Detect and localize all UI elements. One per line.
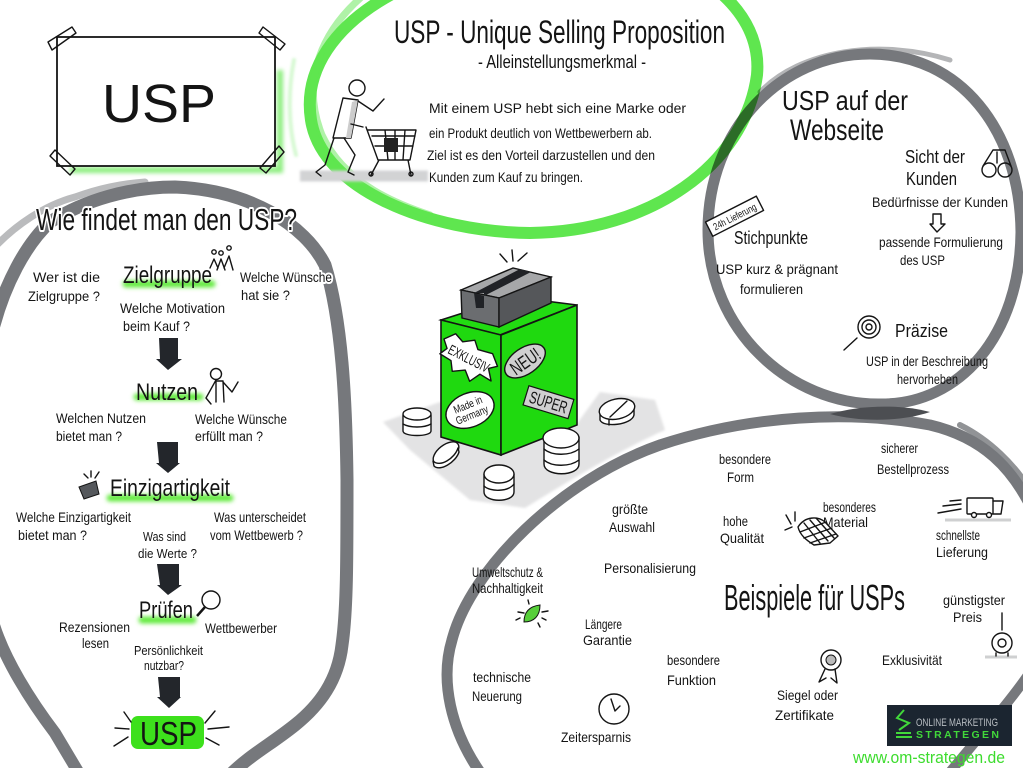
panel content: USP auf der Webseite: Bedürfnisse der Kunden	[872, 194, 1008, 210]
panel content: USP auf der Webseite: Webseite	[790, 114, 884, 147]
step: Nutzen: Welche Wünsche	[195, 411, 287, 427]
text block: USP definition	[427, 100, 686, 185]
panel content: Beispiele für USPs: Längere	[585, 616, 622, 632]
step: Zielgruppe: Wer ist die	[33, 269, 100, 285]
step: Zielgruppe: Welche Wünsche	[240, 269, 332, 285]
step: Prüfen: Rezensionen	[59, 619, 130, 635]
sticker: Exklusiv: EXKLUSIV	[446, 341, 492, 376]
panel content: Beispiele für USPs: Zertifikate	[775, 707, 834, 723]
sticker: Neu: NEU!	[507, 344, 545, 380]
panel content: Beispiele für USPs: schnellste	[936, 527, 980, 543]
panel content: Beispiele für USPs: Bestellprozess	[877, 461, 949, 477]
step: Zielgruppe: Zielgruppe	[123, 262, 212, 289]
arrow: needs to wording	[930, 214, 945, 232]
panel content: Beispiele für USPs: Garantie	[583, 632, 632, 648]
icon: binoculars	[982, 150, 1012, 177]
panel content: USP auf der Webseite: USP auf der	[782, 85, 908, 116]
icon: person with shopping cart	[300, 80, 428, 176]
logo: Online Marketing Strategen: STRATEGEN	[916, 729, 999, 741]
panel content: Beispiele für USPs: Nachhaltigkeit	[472, 580, 543, 596]
step: Nutzen	[56, 368, 287, 444]
panel content: Beispiele für USPs: Beispiele für USPs	[724, 577, 905, 618]
panel content: Beispiele für USPs: Lieferung	[936, 544, 988, 560]
sticker: Made in Germany: Germany	[454, 403, 491, 427]
step: Prüfen: Prüfen	[139, 597, 193, 624]
step: Prüfen: nutzbar?	[144, 658, 184, 673]
panel: grey ring right	[708, 49, 1021, 404]
panel content: Beispiele für USPs: besonderes	[823, 499, 876, 515]
step: Zielgruppe: Zielgruppe ?	[28, 288, 100, 304]
step: Nutzen: erfüllt man ?	[195, 428, 263, 444]
panel content: Beispiele für USPs: Material	[823, 514, 868, 530]
panel content: Beispiele für USPs: Funktion	[667, 672, 716, 688]
panel content: Beispiele für USPs: Neuerung	[472, 688, 522, 704]
panel content: Beispiele für USPs	[472, 440, 1017, 745]
panel content: Beispiele für USPs: günstigster	[943, 592, 1005, 608]
text block: USP definition: ein Produkt deutlich von Wettbewerbern ab.	[429, 125, 652, 141]
text block: USP definition: Mit einem USP hebt sich eine Marke oder	[429, 100, 686, 116]
step: Einzigartigkeit: Welche Einzigartigkeit	[16, 509, 131, 525]
step: Zielgruppe	[28, 246, 332, 334]
heading: Wie findet man den USP?: Wie findet man den USP?	[36, 202, 297, 237]
heading: USP - Unique Selling Proposition	[394, 14, 725, 72]
step: Einzigartigkeit: vom Wettbewerb ?	[210, 527, 303, 543]
step: Prüfen: Persönlichkeit	[134, 643, 203, 658]
panel content: USP auf der Webseite: Sicht der	[905, 147, 965, 167]
panel content: Beispiele für USPs: Preis	[953, 609, 982, 625]
sticker: Exklusiv	[432, 327, 504, 390]
step: Prüfen: lesen	[82, 635, 109, 651]
tape corners	[48, 27, 285, 175]
step: Zielgruppe: beim Kauf ?	[123, 318, 190, 334]
panel content: Beispiele für USPs: Umweltschutz &	[472, 564, 543, 580]
step: Einzigartigkeit: die Werte ?	[138, 546, 197, 561]
title text: USP	[102, 74, 216, 134]
panel: grey ring left	[0, 182, 347, 768]
result: USP highlighted	[114, 711, 229, 752]
arrow: Einzigartigkeit to Prüfen	[157, 564, 182, 595]
sticker: Super	[523, 386, 574, 419]
panel content: USP auf der Webseite: passende Formulierung	[879, 234, 1003, 250]
panel content: Beispiele für USPs: Qualität	[720, 530, 764, 546]
icon: clock	[599, 694, 629, 724]
panel content: USP auf der Webseite: hervorheben	[897, 371, 958, 387]
title box: USP	[48, 27, 285, 175]
icon: leaf	[516, 600, 548, 627]
panel content: Beispiele für USPs: hohe	[723, 513, 748, 529]
panel content: Beispiele für USPs: Zeitersparnis	[561, 729, 631, 745]
heading: USP - Unique Selling Proposition: - Alleinstellungsmerkmal -	[478, 52, 646, 72]
gift boxes	[403, 395, 637, 500]
logo: Online Marketing Strategen: ONLINE MARKETING	[916, 717, 998, 729]
panel content: USP auf der Webseite: Kunden	[906, 169, 957, 189]
step: Zielgruppe: hat sie ?	[241, 287, 290, 303]
panel content: USP auf der Webseite: Stichpunkte	[734, 228, 808, 248]
logo: Online Marketing Strategen	[887, 705, 1012, 746]
panel content: USP auf der Webseite: USP in der Beschreibung	[866, 353, 988, 369]
step: Nutzen: Nutzen	[136, 379, 198, 406]
icon: person thumbs up	[206, 368, 238, 404]
illustration: green product box	[403, 250, 637, 500]
step: Nutzen: Welchen Nutzen	[56, 410, 146, 426]
result: USP highlighted: USP	[140, 715, 197, 752]
arrow: Zielgruppe to Nutzen	[156, 338, 182, 370]
panel: green header ring	[290, 0, 757, 233]
step: Einzigartigkeit	[16, 471, 306, 561]
panel content: Beispiele für USPs: Exklusivität	[882, 652, 942, 668]
panel content: USP auf der Webseite	[706, 85, 1012, 387]
step: Nutzen: bietet man ?	[56, 428, 122, 444]
icon: delivery truck	[938, 498, 1011, 520]
green box	[441, 297, 577, 455]
panel content: Beispiele für USPs: sicherer	[881, 440, 918, 456]
panel content: Beispiele für USPs: besondere	[719, 451, 771, 467]
website url: www.om-strategen.de	[852, 748, 1005, 767]
panel content: USP auf der Webseite: des USP	[900, 252, 945, 268]
icon: rosette seal	[819, 650, 841, 683]
step: Einzigartigkeit: Einzigartigkeit	[110, 475, 230, 502]
panel content: Beispiele für USPs: besondere	[667, 652, 720, 668]
icon: material mesh	[785, 512, 838, 545]
panel: grey ring bottom right	[446, 407, 1023, 768]
step: Zielgruppe: Welche Motivation	[120, 300, 225, 316]
panel content: USP auf der Webseite: USP kurz & prägnant	[716, 261, 838, 277]
icon: small package	[79, 471, 99, 499]
panel content: Beispiele für USPs: technische	[473, 669, 531, 685]
text block: USP definition: Ziel ist es den Vorteil darzustellen und den	[427, 147, 655, 163]
sticker: Made in Germany	[440, 385, 500, 435]
sticker: Made in Germany: Made in	[452, 394, 484, 417]
panel content: Beispiele für USPs: Personalisierung	[604, 560, 696, 576]
step: Prüfen: Wettbewerber	[205, 620, 277, 636]
panel content: USP auf der Webseite: Präzise	[895, 321, 948, 341]
text block: USP definition: Kunden zum Kauf zu bringen.	[429, 169, 583, 185]
icon: magnifier	[197, 591, 220, 616]
arrow: Prüfen to USP	[157, 677, 181, 708]
package on top	[461, 268, 551, 327]
arrow: Nutzen to Einzigartigkeit	[156, 442, 180, 473]
panel content: Beispiele für USPs: Auswahl	[609, 519, 655, 535]
panel content: USP auf der Webseite: formulieren	[740, 281, 803, 297]
icon: piggy bank	[985, 613, 1017, 657]
panel content: Beispiele für USPs: Form	[727, 469, 754, 485]
icon: target and arrow	[844, 316, 880, 350]
tag: 24h Lieferung: 24h Lieferung	[712, 202, 759, 233]
panel content: Beispiele für USPs: Siegel oder	[777, 687, 838, 703]
sticker: Super: SUPER	[527, 388, 570, 417]
step: Einzigartigkeit: bietet man ?	[18, 527, 87, 543]
step: Prüfen	[59, 591, 277, 673]
icon: group of people	[210, 246, 233, 270]
step: Einzigartigkeit: Was sind	[143, 529, 186, 544]
rays	[500, 250, 527, 262]
heading: USP - Unique Selling Proposition: USP - Unique Selling Proposition	[394, 14, 725, 50]
panel content: Beispiele für USPs: größte	[612, 501, 648, 517]
panel: central grey shadow	[383, 392, 665, 508]
step: Einzigartigkeit: Was unterscheidet	[214, 509, 306, 525]
